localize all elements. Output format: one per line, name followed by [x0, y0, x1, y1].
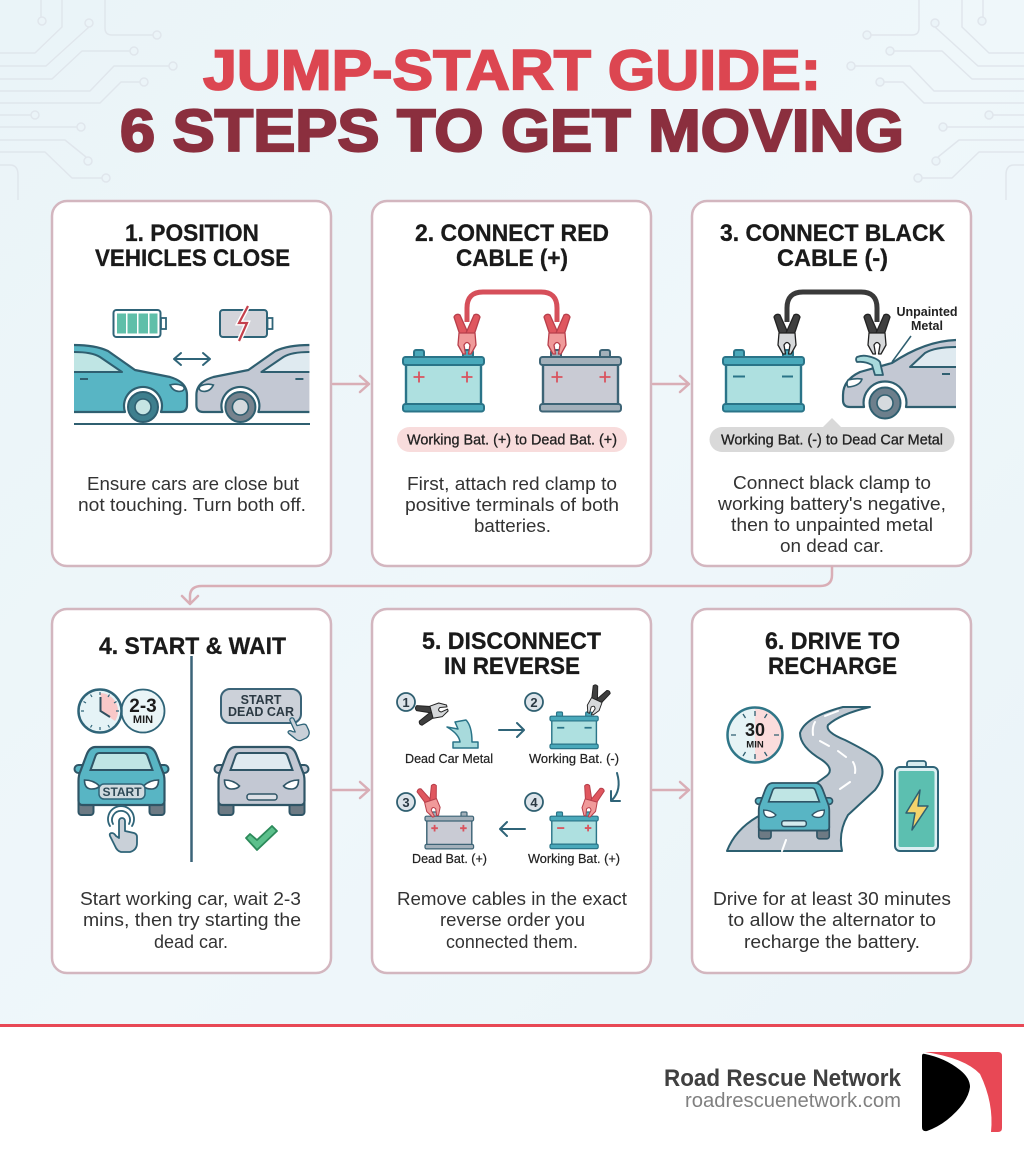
title line 2: 6 STEPS TO GET MOVING [120, 98, 904, 164]
divider [190, 656, 193, 862]
icon: black clamp right [864, 314, 890, 354]
icon: charging battery [895, 761, 938, 851]
heading: step 2 [415, 220, 609, 272]
text: step 3: then to unpainted metal [731, 515, 933, 535]
heading: step 1 [95, 220, 290, 272]
title [120, 38, 904, 164]
pill label: Working Bat. (+) to Dead Bat. (+) [407, 432, 617, 448]
pill label [710, 418, 954, 452]
text: step 1: Ensure cars are close but [87, 474, 299, 494]
heading: step 1: 1. POSITION [125, 220, 259, 247]
icon: dead battery [220, 306, 272, 341]
icon: black clamp off metal [415, 698, 450, 726]
icon: stopwatch [728, 708, 782, 762]
text: step 2: positive terminals of both [405, 495, 619, 515]
text: step 2: First, attach red clamp to [407, 474, 617, 494]
icon: red clamp [416, 784, 445, 819]
icon: double arrow [174, 353, 210, 365]
icon: working battery [550, 812, 598, 849]
icon: red clamp right [544, 314, 570, 354]
text: step 6: to allow the alternator to [728, 910, 936, 930]
text: step 5: reverse order you [440, 910, 585, 930]
icon: working battery [403, 350, 484, 412]
heading: step 6: 6. DRIVE TO [765, 628, 900, 655]
red cable [467, 292, 557, 322]
text: step 4 [80, 889, 301, 952]
number badge 2 [525, 693, 543, 711]
text: step 5: connected them. [446, 932, 578, 952]
heading: step 3: 3. CONNECT BLACK [720, 220, 946, 247]
start dead car button: DEAD CAR [228, 705, 294, 719]
arrow [499, 723, 524, 737]
icon: grey car front [214, 747, 308, 815]
pill label [397, 427, 627, 452]
start dead car button [221, 689, 301, 723]
number badge 3 [397, 793, 415, 811]
label: unpainted metal [892, 305, 958, 362]
text: step 4: Start working car, wait 2-3 [80, 889, 301, 909]
text: step 6: Drive for at least 30 minutes [713, 889, 951, 909]
icon: teal car front [755, 783, 833, 839]
brand url: roadrescuenetwork.com [685, 1090, 901, 1112]
icon: 2-3 min badge [122, 690, 164, 732]
icon: teal car front [74, 747, 168, 815]
icon: stopwatch: MIN [746, 740, 764, 750]
heading: step 5: 5. DISCONNECT [422, 628, 601, 655]
text: step 4: mins, then try starting the [83, 910, 301, 930]
label: Working Bat. (+) [528, 852, 620, 866]
text: step 2 [405, 474, 619, 536]
icon: working battery [550, 712, 598, 749]
arrow [500, 822, 525, 836]
number badge 4: 4 [530, 795, 538, 810]
icon: pressing hand [108, 806, 137, 852]
text: step 5: Remove cables in the exact [397, 889, 627, 909]
icon: 2-3 min badge: 2-3 [129, 696, 157, 717]
brand name: Road Rescue Network [664, 1065, 902, 1092]
label: Working Bat. (-) [529, 752, 619, 766]
text: step 6: recharge the battery. [744, 932, 920, 952]
text: step 3: working battery's negative, [717, 494, 946, 514]
heading: step 3 [720, 220, 946, 272]
circuit pattern right [847, 0, 1024, 200]
panel: step 2 [372, 201, 651, 566]
heading: step 5: IN REVERSE [444, 653, 580, 680]
arrow: step 1 to 2 [333, 376, 369, 392]
arrow: step 2 to 3 [653, 376, 689, 392]
icon: 2-3 min badge: MIN [133, 714, 153, 726]
icon: check mark [246, 826, 277, 850]
label: Dead Car Metal [405, 752, 493, 766]
arrow: step 3 to 4 [182, 567, 832, 604]
text: step 1: not touching. Turn both off. [78, 495, 306, 515]
icon: black clamp [582, 684, 611, 718]
heading: step 5 [422, 628, 601, 680]
heading: step 6: RECHARGE [768, 653, 897, 680]
text: step 3: Connect black clamp to [733, 473, 931, 493]
icon: stopwatch: 30 [745, 720, 765, 740]
icon: grey car [196, 345, 309, 422]
text: step 6 [713, 889, 951, 952]
number badge 4 [525, 793, 543, 811]
panel: step 3 [692, 201, 971, 566]
footer [0, 1024, 1024, 1154]
heading: step 3: CABLE (-) [777, 245, 888, 272]
panel: step 5 [372, 609, 651, 973]
icon: winding road [727, 707, 882, 851]
heading: step 4: 4. START & WAIT [99, 633, 286, 660]
arrow: step 4 to 5 [333, 782, 369, 798]
icon: working battery [723, 350, 804, 412]
black cable [787, 292, 877, 322]
icon: grey car with open hood [843, 340, 956, 418]
heading: step 2: CABLE (+) [456, 245, 568, 272]
label: unpainted metal: Metal [911, 319, 943, 333]
icon: red clamp [577, 784, 605, 819]
title line 1: JUMP-START GUIDE: [203, 38, 821, 102]
panel: step 4 [52, 609, 331, 973]
start label: START [102, 785, 142, 799]
pill label: Working Bat. (-) to Dead Car Metal [721, 432, 943, 448]
icon: teal car [74, 345, 187, 422]
heading: step 6 [765, 628, 900, 680]
panel: step 1 [52, 201, 331, 566]
number badge 2: 2 [530, 695, 538, 710]
number badge 3: 3 [402, 795, 410, 810]
text: step 5 [397, 889, 627, 952]
icon: dead battery [425, 812, 474, 849]
icon: full battery [114, 310, 166, 337]
heading: step 1: VEHICLES CLOSE [95, 245, 290, 272]
panel: step 6 [692, 609, 971, 973]
text: step 3 [717, 473, 946, 556]
number badge 1 [397, 693, 415, 711]
text: step 3: on dead car. [780, 536, 884, 556]
icon: dead battery [540, 350, 621, 412]
ground line [74, 423, 310, 425]
heading: step 2: 2. CONNECT RED [415, 220, 609, 247]
start dead car button: START [241, 693, 282, 707]
icon: red clamp left [454, 314, 480, 354]
circuit pattern left [0, 0, 177, 200]
text: step 2: batteries. [474, 516, 551, 536]
icon: small hand [283, 713, 311, 744]
logo [922, 1052, 1002, 1132]
icon: black clamp left [774, 314, 800, 354]
label: unpainted metal: Unpainted [896, 305, 958, 319]
label: Dead Bat. (+) [412, 852, 487, 866]
number badge 1: 1 [402, 695, 410, 710]
arrow: curved [611, 773, 620, 801]
text: step 4: dead car. [154, 932, 228, 952]
arrow: step 5 to 6 [653, 782, 689, 798]
icon: bare metal tab [447, 720, 478, 748]
icon: clock [78, 690, 122, 732]
text: step 1 [78, 474, 306, 515]
